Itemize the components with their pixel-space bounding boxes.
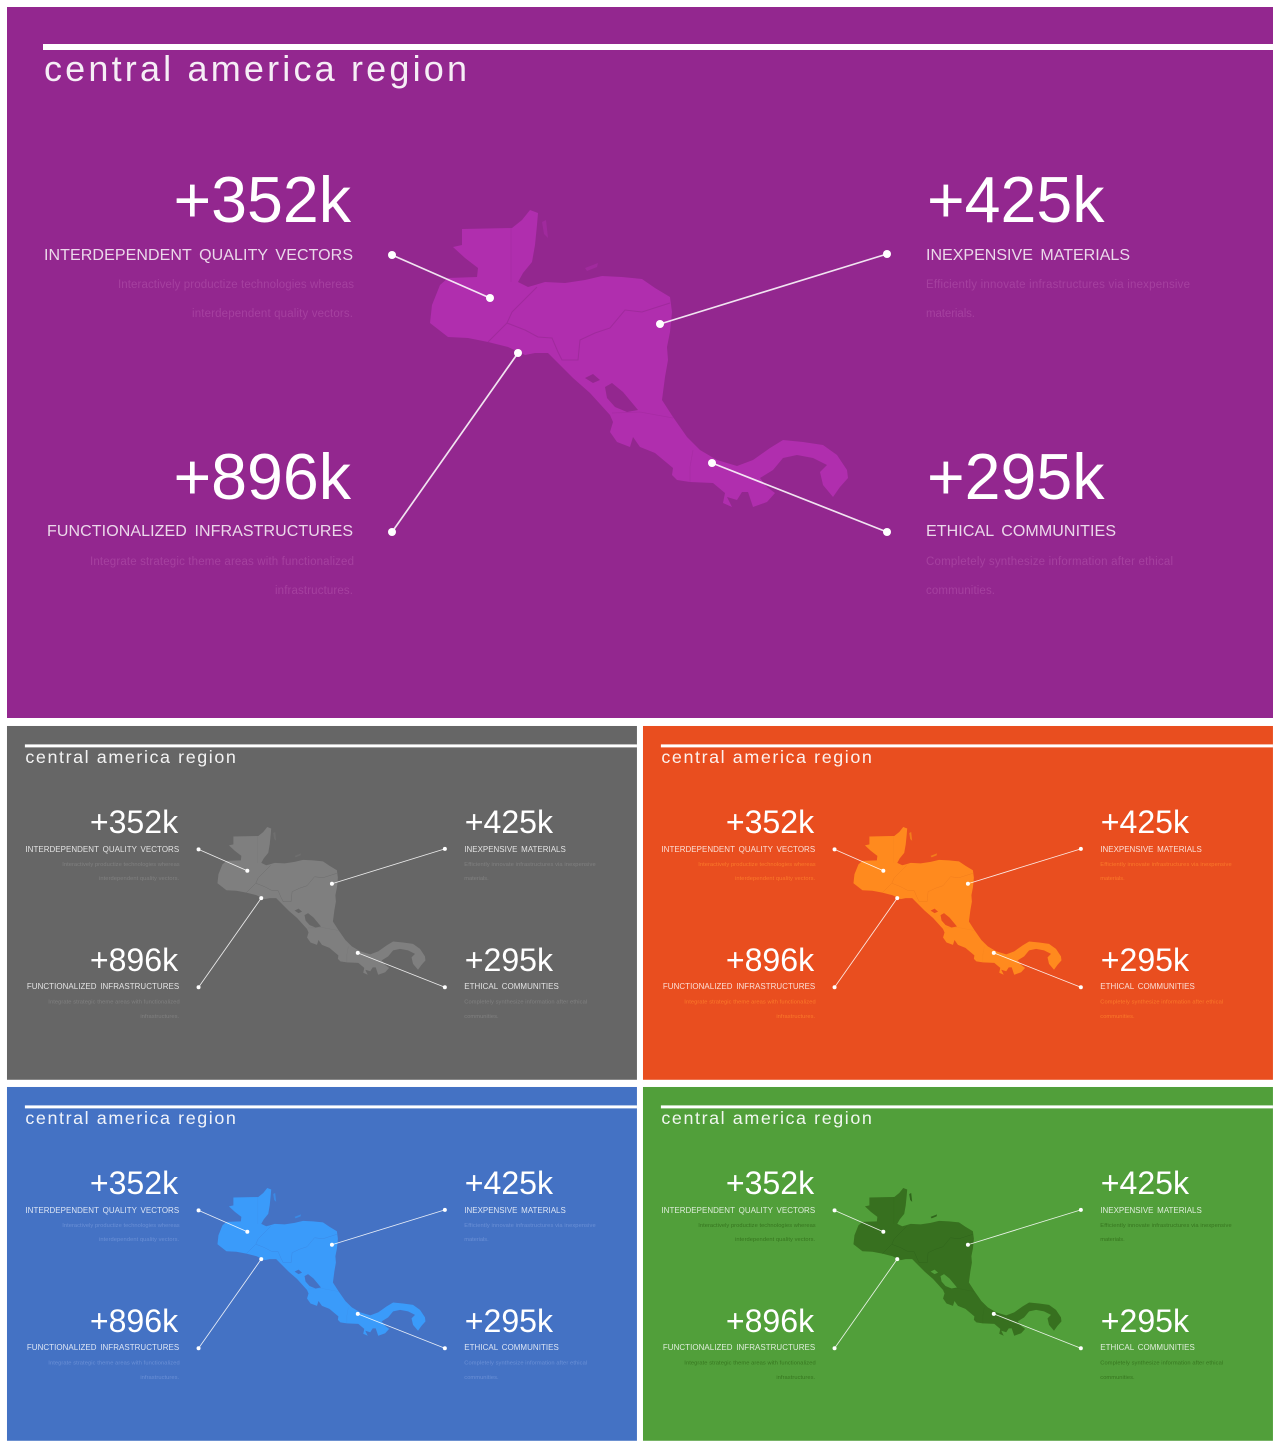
stat: 425k: Efficiently innovate infrastructures via inexpensive: [926, 279, 1190, 291]
title bar: [661, 1105, 1273, 1108]
stat: 352k: [44, 164, 354, 320]
stat: 295k: Completely synthesize information after ethical: [464, 1000, 587, 1006]
stat: 896k: infrastructures.: [140, 1375, 180, 1381]
stat: 425k: +425k: [465, 1165, 554, 1201]
stat: 352k: interdependent quality vectors.: [735, 876, 816, 882]
stat: 352k: [661, 1165, 816, 1243]
stat: 425k: Efficiently innovate infrastructures via inexpensive: [464, 862, 596, 868]
title: central america region: [25, 1108, 236, 1128]
stat: 896k: +896k: [90, 1303, 179, 1339]
stat: 896k: [27, 1303, 180, 1381]
stat: 425k: materials.: [464, 1237, 489, 1243]
stat: 352k: +352k: [90, 804, 179, 840]
panel: orange: [643, 726, 1273, 1080]
stat: 896k: FUNCTIONALIZED INFRASTRUCTURES: [663, 1343, 815, 1352]
stat: 352k: interdependent quality vectors.: [99, 1237, 180, 1243]
stat: 295k: communities.: [464, 1375, 499, 1381]
stat: 352k: INTERDEPENDENT QUALITY VECTORS: [661, 845, 815, 854]
stat: 896k: [663, 942, 816, 1020]
stat: 352k: +352k: [726, 1165, 815, 1201]
stat: 425k: +425k: [1101, 1165, 1190, 1201]
stat: 896k: [27, 942, 180, 1020]
stat: 425k: Efficiently innovate infrastructures via inexpensive: [1100, 1223, 1232, 1229]
map: [853, 1188, 1061, 1336]
stat: 352k: Interactively productize technologies whereas: [118, 279, 354, 291]
stat: 425k: INEXPENSIVE MATERIALS: [926, 247, 1130, 264]
stat: 896k: infrastructures.: [776, 1014, 816, 1020]
stat: 896k: [47, 441, 354, 597]
stat: 896k: +896k: [90, 942, 179, 978]
stat: 425k: [1100, 804, 1232, 882]
stat: 425k: Efficiently innovate infrastructures via inexpensive: [1100, 862, 1232, 868]
stat: 295k: +295k: [927, 441, 1105, 513]
stat: 425k: materials.: [1100, 1237, 1125, 1243]
stat: 896k: Integrate strategic theme areas with functionalized: [684, 1361, 816, 1367]
stat: 352k: Interactively productize technologies whereas: [698, 1223, 816, 1229]
stat: 896k: FUNCTIONALIZED INFRASTRUCTURES: [47, 523, 353, 540]
stat: 352k: +352k: [90, 1165, 179, 1201]
connector dots: [197, 1208, 447, 1350]
stat: 295k: +295k: [1101, 942, 1190, 978]
map: [853, 827, 1061, 975]
stat: 352k: Interactively productize technologies whereas: [698, 862, 816, 868]
stat: 425k: Efficiently innovate infrastructures via inexpensive: [464, 1223, 596, 1229]
stat: 425k: materials.: [1100, 876, 1125, 882]
stat: 295k: communities.: [464, 1014, 499, 1020]
stat: 425k: [1100, 1165, 1232, 1243]
panel: green: [643, 1087, 1273, 1441]
stat: 352k: interdependent quality vectors.: [735, 1237, 816, 1243]
stat: 295k: communities.: [1100, 1014, 1135, 1020]
panel: blue: [7, 1087, 637, 1441]
title: central america region: [661, 1108, 872, 1128]
map: [430, 210, 848, 507]
title bar: [661, 744, 1273, 747]
stat: 425k: [464, 1165, 596, 1243]
stat: 896k: FUNCTIONALIZED INFRASTRUCTURES: [27, 982, 179, 991]
stat: 295k: communities.: [926, 585, 995, 597]
panel: gray: [7, 726, 637, 1080]
stat: 896k: infrastructures.: [776, 1375, 816, 1381]
connector lines: [199, 1210, 445, 1348]
title: central america region: [44, 48, 467, 89]
stat: 425k: INEXPENSIVE MATERIALS: [464, 845, 566, 854]
stat: 352k: [661, 804, 816, 882]
stat: 352k: INTERDEPENDENT QUALITY VECTORS: [25, 845, 179, 854]
stat: 425k: materials.: [926, 308, 975, 320]
title bar: [43, 44, 1273, 50]
stat: 295k: +295k: [1101, 1303, 1190, 1339]
stat: 295k: ETHICAL COMMUNITIES: [1100, 1343, 1195, 1352]
stat: 425k: INEXPENSIVE MATERIALS: [1100, 1206, 1202, 1215]
stat: 425k: [464, 804, 596, 882]
stat: 425k: INEXPENSIVE MATERIALS: [464, 1206, 566, 1215]
connector lines: [835, 849, 1081, 987]
stat: 295k: [926, 441, 1173, 597]
stat: 425k: materials.: [464, 876, 489, 882]
stat: 295k: [464, 942, 587, 1020]
stat: 896k: infrastructures.: [275, 585, 353, 597]
stat: 896k: FUNCTIONALIZED INFRASTRUCTURES: [663, 982, 815, 991]
stat: 425k: +425k: [465, 804, 554, 840]
stat: 425k: +425k: [927, 164, 1105, 236]
map: [217, 827, 425, 975]
stat: 295k: +295k: [465, 1303, 554, 1339]
stat: 352k: Interactively productize technologies whereas: [62, 1223, 180, 1229]
stat: 896k: +896k: [173, 441, 352, 513]
stat: 295k: ETHICAL COMMUNITIES: [464, 982, 559, 991]
connector lines: [199, 849, 445, 987]
stat: 896k: infrastructures.: [140, 1014, 180, 1020]
stat: 896k: +896k: [726, 942, 815, 978]
stat: 352k: INTERDEPENDENT QUALITY VECTORS: [661, 1206, 815, 1215]
title: central america region: [25, 747, 236, 767]
connector lines: [835, 1210, 1081, 1348]
connector dots: [833, 1208, 1083, 1350]
stat: 295k: Completely synthesize information after ethical: [926, 556, 1173, 568]
stat: 295k: Completely synthesize information after ethical: [1100, 1000, 1223, 1006]
stat: 352k: INTERDEPENDENT QUALITY VECTORS: [25, 1206, 179, 1215]
stat: 352k: INTERDEPENDENT QUALITY VECTORS: [44, 247, 353, 264]
stat: 896k: Integrate strategic theme areas with functionalized: [684, 1000, 816, 1006]
stat: 352k: Interactively productize technologies whereas: [62, 862, 180, 868]
stat: 896k: [663, 1303, 816, 1381]
stat: 295k: +295k: [465, 942, 554, 978]
connector dots: [388, 250, 891, 536]
stat: 295k: communities.: [1100, 1375, 1135, 1381]
title bar: [25, 744, 637, 747]
stat: 425k: [926, 164, 1190, 320]
stat: 295k: [464, 1303, 587, 1381]
stat: 295k: Completely synthesize information after ethical: [464, 1361, 587, 1367]
stat: 896k: +896k: [726, 1303, 815, 1339]
stat: 295k: [1100, 1303, 1223, 1381]
stat: 295k: ETHICAL COMMUNITIES: [464, 1343, 559, 1352]
stat: 425k: +425k: [1101, 804, 1190, 840]
stat: 896k: FUNCTIONALIZED INFRASTRUCTURES: [27, 1343, 179, 1352]
map: [217, 1188, 425, 1336]
stat: 295k: Completely synthesize information after ethical: [1100, 1361, 1223, 1367]
title bar: [25, 1105, 637, 1108]
panel: purple main: [7, 7, 1273, 718]
stat: 425k: INEXPENSIVE MATERIALS: [1100, 845, 1202, 854]
stat: 352k: interdependent quality vectors.: [192, 308, 353, 320]
connector dots: [197, 847, 447, 989]
stat: 295k: [1100, 942, 1223, 1020]
connector lines: [392, 254, 887, 532]
stat: 896k: Integrate strategic theme areas with functionalized: [90, 556, 354, 568]
stat: 295k: ETHICAL COMMUNITIES: [1100, 982, 1195, 991]
stat: 295k: ETHICAL COMMUNITIES: [926, 523, 1116, 540]
stat: 352k: [25, 804, 180, 882]
connector dots: [833, 847, 1083, 989]
stat: 352k: [25, 1165, 180, 1243]
stat: 896k: Integrate strategic theme areas with functionalized: [48, 1000, 180, 1006]
stat: 352k: +352k: [173, 164, 352, 236]
stat: 896k: Integrate strategic theme areas with functionalized: [48, 1361, 180, 1367]
stat: 352k: +352k: [726, 804, 815, 840]
stat: 352k: interdependent quality vectors.: [99, 876, 180, 882]
title: central america region: [661, 747, 872, 767]
